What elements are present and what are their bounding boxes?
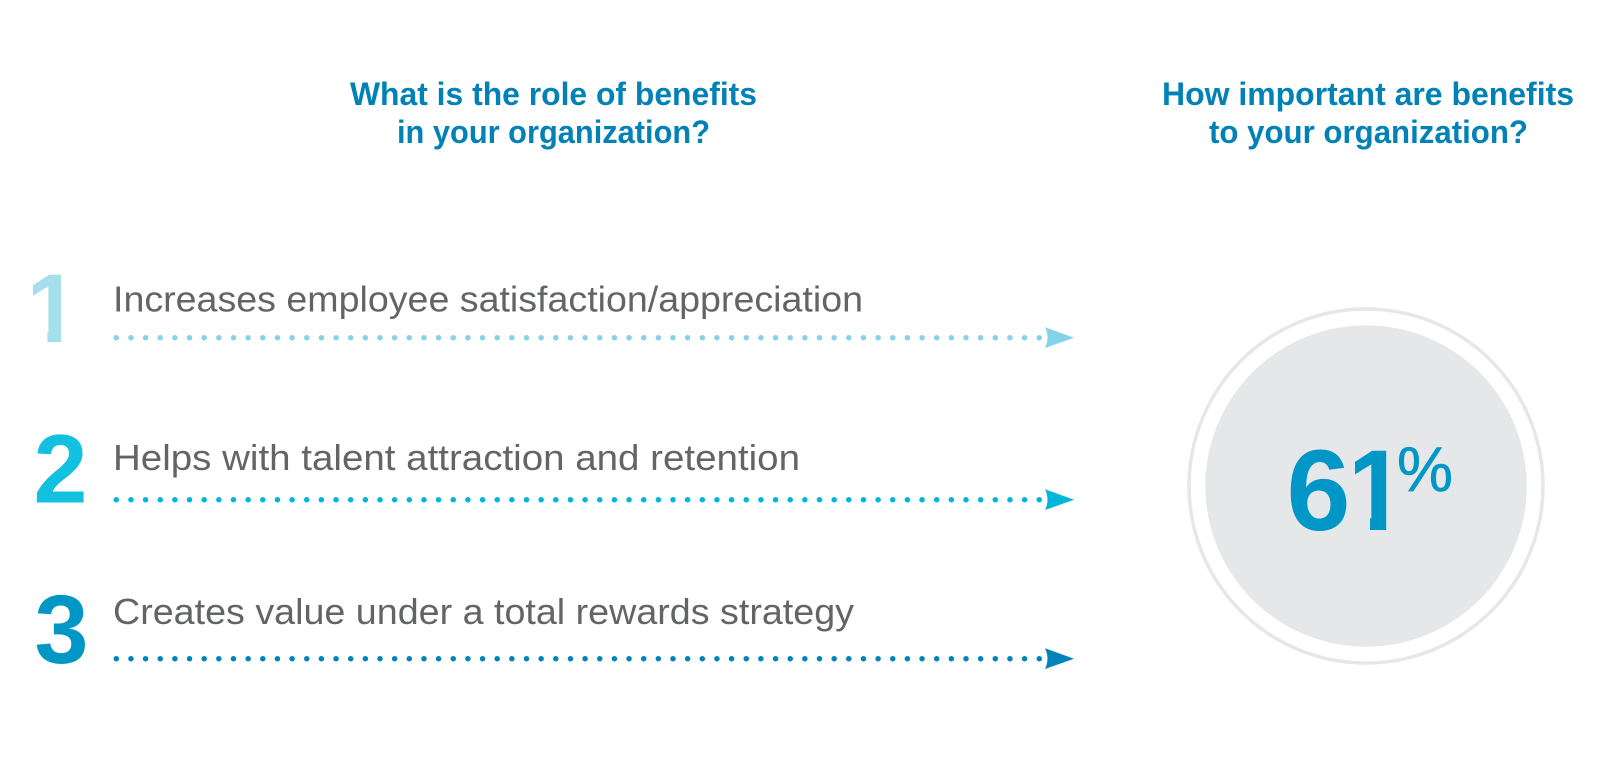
arrow 2 <box>116 489 1074 510</box>
heading: role of benefits <box>350 76 757 150</box>
outer ring <box>1189 309 1543 663</box>
stat value: % <box>1397 435 1453 505</box>
list item 1 <box>26 254 1074 363</box>
heading: importance of benefits: How important are benefits <box>1162 76 1574 112</box>
number 2: 2 <box>34 415 87 524</box>
stat value: 6 <box>1286 427 1350 555</box>
label: talent: Helps with talent attraction and retention <box>113 437 800 478</box>
label: satisfaction: Increases employee satisfaction/appreciation <box>113 279 863 320</box>
inner disc <box>1205 325 1527 647</box>
arrow 3 <box>116 648 1074 669</box>
list item 2 <box>34 415 1074 524</box>
heading: importance of benefits <box>1162 76 1574 150</box>
number 3: 3 <box>34 575 88 684</box>
heading: role of benefits: What is the role of benefits <box>350 76 757 112</box>
stat value <box>1290 446 1452 531</box>
stat circle <box>1189 309 1543 663</box>
label: total rewards: Creates value under a total rewards strategy <box>113 591 854 632</box>
heading: importance of benefits: to your organization? <box>1209 114 1528 150</box>
stat value: 1 <box>1344 427 1408 555</box>
heading: role of benefits: in your organization? <box>397 114 710 150</box>
panel: importance of benefits <box>1162 76 1574 663</box>
list item 3 <box>34 575 1074 684</box>
panel: role of benefits <box>26 76 1074 684</box>
number 1: 1 <box>26 254 80 363</box>
arrow 1 <box>116 327 1074 348</box>
infographic canvas <box>33 82 1573 669</box>
